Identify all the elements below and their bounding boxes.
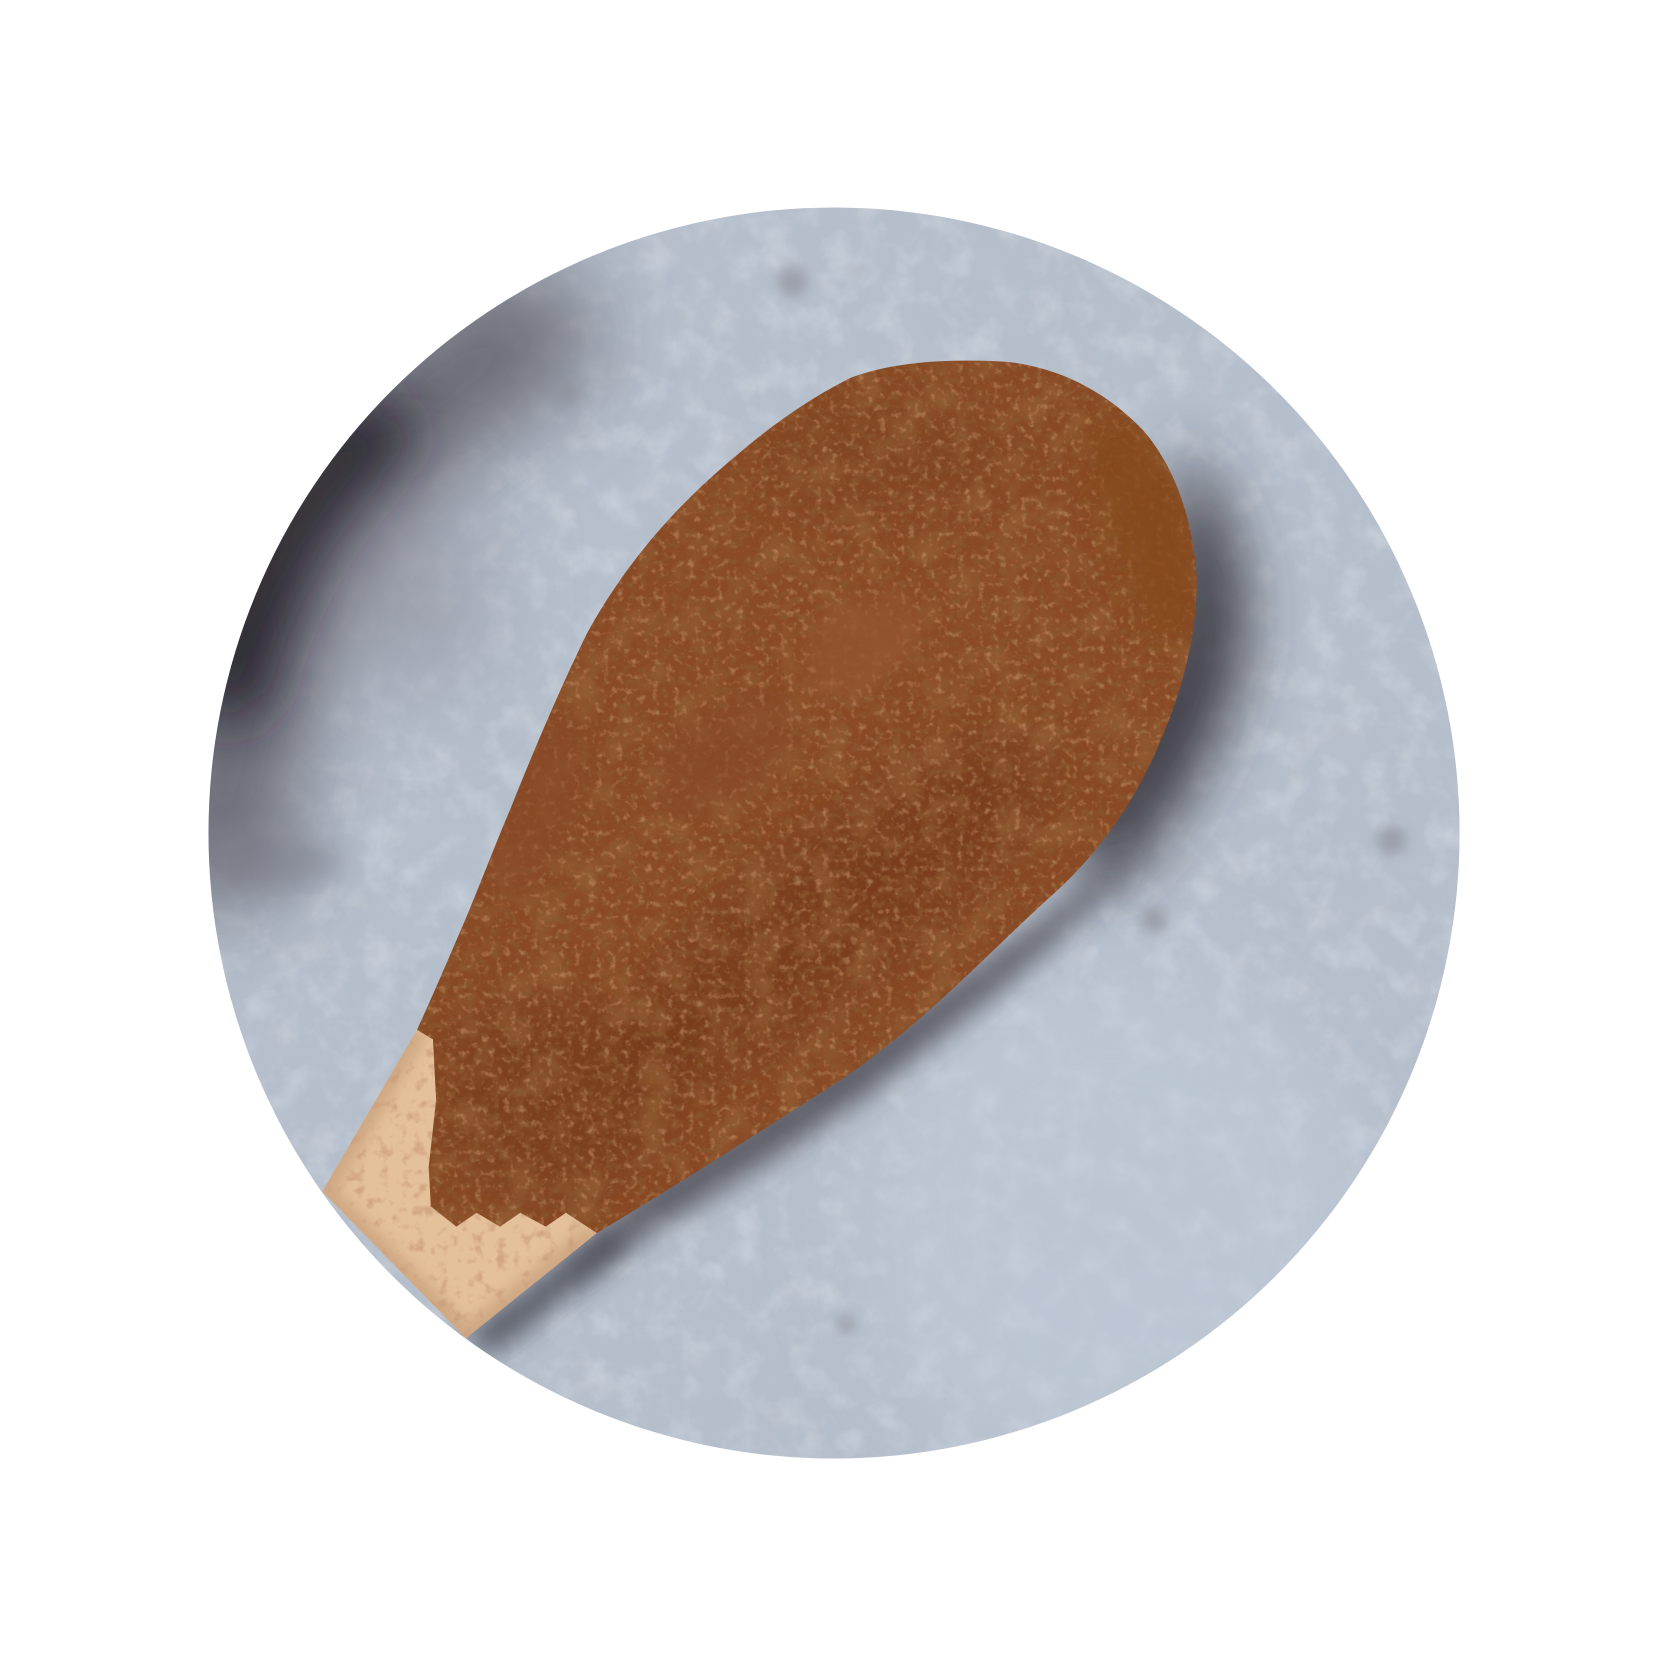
powder tone patches: [436, 404, 1094, 1191]
spoon handle: [322, 1030, 597, 1338]
shadow: dark upper left corner of stone: [213, 335, 521, 891]
illustration: circular photo of powder on a spoon: [208, 208, 1460, 1458]
smooth patches of pressed powder: [464, 422, 1195, 911]
spoon bowl covered in cocoa powder: [404, 351, 1213, 1245]
stone background: [202, 202, 1468, 1479]
shadow: cast by spoon on lower right: [457, 447, 1245, 1353]
panel: circular photo: [202, 202, 1468, 1479]
speckles on stone: [559, 267, 1406, 1334]
